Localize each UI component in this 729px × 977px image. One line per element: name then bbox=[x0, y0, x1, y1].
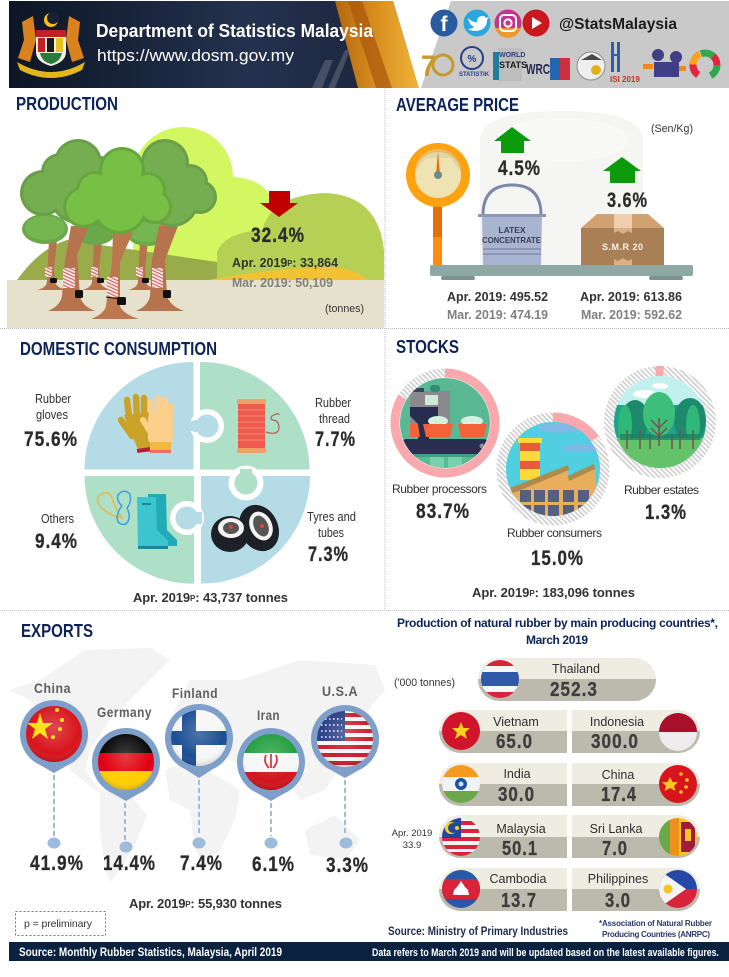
label: rubber consumers bbox=[507, 526, 602, 570]
arrow: production down bbox=[260, 191, 298, 217]
logo: WRC 2019 bbox=[526, 58, 570, 80]
card: Thailand: 252.3 bbox=[550, 679, 598, 701]
note: Malaysia April 2019: 33.9 bbox=[403, 840, 421, 851]
label: tyres and tubes: Tyres and bbox=[307, 510, 356, 524]
card: Vietnam: Vietnam bbox=[493, 715, 539, 729]
card: Cambodia: Cambodia bbox=[490, 872, 547, 886]
event logos bbox=[421, 42, 717, 84]
text: consumption total: Apr. 2019 bbox=[133, 590, 190, 605]
card: Philippines bbox=[572, 868, 700, 912]
plantation illustration bbox=[7, 127, 384, 328]
label: rubber gloves bbox=[24, 392, 78, 451]
label: rubber thread bbox=[315, 396, 356, 451]
tree right bbox=[132, 139, 217, 311]
background coins bbox=[480, 111, 643, 265]
icon: boots bbox=[137, 494, 177, 549]
panel: production bbox=[7, 94, 384, 328]
card: Sri Lanka: Sri Lanka bbox=[590, 822, 642, 836]
value: latex change: 4.5% bbox=[498, 157, 541, 180]
logo: census bbox=[643, 49, 686, 77]
label: tyres and tubes bbox=[307, 510, 356, 566]
icon: youtube bbox=[522, 10, 550, 36]
logo: SDG wheel bbox=[693, 53, 717, 77]
legend: preliminary bbox=[16, 912, 106, 936]
card: Indonesia bbox=[572, 710, 700, 753]
footer bar bbox=[9, 942, 729, 961]
pin: Germany bbox=[92, 704, 160, 875]
note: Malaysia April 2019: Apr. 2019 bbox=[392, 828, 432, 839]
label: rubber thread: 7.7% bbox=[315, 428, 356, 451]
arrow: latex up bbox=[494, 127, 531, 153]
card: India: India bbox=[503, 767, 531, 781]
header title: Department of Statistics Malaysia bbox=[96, 21, 374, 41]
label: tyres and tubes: 7.3% bbox=[308, 543, 349, 566]
label: others: 9.4% bbox=[35, 530, 78, 553]
text: latex March price: Mar. 2019: 474.19 bbox=[447, 307, 548, 322]
text: April production: : 33,864 bbox=[292, 255, 339, 270]
footer source: Source: Monthly Rubber Statistics, Malaysia, April 2019 bbox=[19, 947, 282, 959]
icon: rubber bands bbox=[98, 491, 131, 524]
card: Cambodia: 13.7 bbox=[501, 890, 537, 912]
label: rubber processors: Rubber processors bbox=[392, 482, 487, 496]
text: SMR April price: Apr. 2019: 613.86 bbox=[580, 289, 682, 304]
card: Thailand bbox=[478, 658, 656, 701]
value: Finland: 7.4% bbox=[180, 852, 223, 875]
note: Malaysia April 2019 bbox=[392, 828, 432, 851]
label: Finland: Finland bbox=[172, 685, 218, 701]
section dividers bbox=[0, 88, 729, 610]
panel: average price bbox=[396, 95, 693, 322]
chart: rubber consumers bbox=[502, 418, 604, 520]
panel: exports bbox=[9, 621, 385, 936]
icon: gloves bbox=[121, 397, 173, 453]
legend: preliminary: p = preliminary bbox=[24, 918, 93, 930]
tree front bbox=[63, 147, 172, 319]
card: India: 30.0 bbox=[498, 784, 535, 806]
label: SMR 20: S.M.R 20 bbox=[602, 242, 643, 252]
text: consumption total: P bbox=[190, 594, 196, 603]
label: rubber estates bbox=[624, 483, 699, 524]
footnote: ANRPC bbox=[599, 919, 712, 939]
value: China: 41.9% bbox=[30, 852, 84, 875]
icon: facebook bbox=[430, 10, 458, 36]
label: rubber estates: Rubber estates bbox=[624, 483, 699, 497]
label: rubber gloves: gloves bbox=[36, 408, 68, 422]
header banner bbox=[9, 1, 729, 88]
label: rubber thread: Rubber bbox=[315, 396, 351, 410]
card: Malaysia bbox=[439, 815, 567, 860]
card: China: 17.4 bbox=[601, 784, 637, 806]
logo: ISI 2019: ISI 2019 bbox=[610, 75, 640, 84]
logo: World Stats: STATS bbox=[499, 60, 527, 70]
source: Ministry of Primary Industries: Source: Ministry of Primary Industries bbox=[388, 926, 568, 938]
text: exports total: P bbox=[185, 900, 191, 909]
icon: thread spool bbox=[237, 399, 279, 453]
text: March production: Mar. 2019: 50,109 bbox=[232, 275, 333, 290]
value: Iran: 6.1% bbox=[252, 853, 295, 876]
value: USA: 3.3% bbox=[326, 854, 369, 877]
logo: 70 years bbox=[421, 50, 453, 83]
value: SMR change: 3.6% bbox=[607, 189, 648, 212]
pin: China bbox=[20, 680, 88, 875]
chart: rubber estates bbox=[605, 367, 715, 477]
card: Sri Lanka: 7.0 bbox=[602, 838, 628, 860]
label: rubber thread: thread bbox=[319, 412, 350, 426]
unit: thousand tonnes: ('000 tonnes) bbox=[394, 677, 455, 689]
text: stocks total: : 183,096 tonnes bbox=[535, 585, 635, 600]
label: rubber gloves: 75.6% bbox=[24, 428, 78, 451]
logo: forum bbox=[577, 52, 605, 80]
text: stocks total: Apr. 2019 bbox=[472, 585, 529, 600]
label: tyres and tubes: tubes bbox=[318, 526, 344, 540]
card: Sri Lanka bbox=[572, 815, 700, 860]
card: China bbox=[572, 763, 700, 806]
logo: World Stats bbox=[493, 48, 527, 81]
logo: 70 years: 7 bbox=[421, 50, 436, 83]
text: SMR March price: Mar. 2019: 592.62 bbox=[581, 307, 682, 322]
label: rubber consumers: 15.0% bbox=[531, 547, 584, 570]
icon: instagram bbox=[494, 10, 522, 38]
card: India bbox=[439, 763, 567, 806]
heading: domestic consumption: DOMESTIC CONSUMPTION bbox=[20, 339, 217, 359]
tree left bbox=[20, 139, 119, 311]
footnote: ANRPC: Producing Countries (ANRPC) bbox=[602, 930, 710, 939]
box: SMR 20 bbox=[581, 214, 664, 265]
text: stocks total: P bbox=[529, 589, 535, 598]
title: production by country: Production of natural rubber by main producing countries*, bbox=[397, 616, 718, 630]
value: production change: 32.4% bbox=[251, 224, 305, 247]
label: rubber consumers: Rubber consumers bbox=[507, 526, 602, 540]
label: Germany: Germany bbox=[97, 704, 152, 720]
scale illustration bbox=[406, 143, 693, 280]
logo: Hari Statistik: STATISTIK bbox=[459, 72, 490, 78]
icon: tyres bbox=[211, 498, 286, 558]
text: consumption total: : 43,737 tonnes bbox=[195, 590, 288, 605]
pin: USA bbox=[311, 683, 379, 877]
logo: Hari Statistik: % bbox=[468, 54, 477, 65]
unit: sen per kg: (Sen/Kg) bbox=[651, 123, 693, 135]
logo: World Stats: WORLD bbox=[499, 52, 525, 59]
heading: exports: EXPORTS bbox=[21, 621, 93, 641]
icon: Malaysia coat of arms bbox=[17, 12, 85, 78]
icon: twitter bbox=[464, 10, 490, 36]
text: latex April price: Apr. 2019: 495.52 bbox=[447, 289, 548, 304]
label: rubber estates: 1.3% bbox=[645, 501, 687, 524]
text: exports total: : 55,930 tonnes bbox=[190, 896, 282, 911]
arrow: SMR up bbox=[603, 157, 641, 183]
logo: WRC 2019: WRC bbox=[526, 61, 550, 78]
panel: stocks bbox=[392, 337, 715, 600]
text: April production: P bbox=[287, 259, 293, 268]
social handle: @StatsMalaysia bbox=[559, 16, 677, 33]
panel: domestic consumption bbox=[20, 339, 356, 605]
label: rubber gloves: Rubber bbox=[35, 392, 71, 406]
card: Thailand: Thailand bbox=[552, 662, 600, 676]
unit: tonnes: (tonnes) bbox=[325, 303, 364, 315]
text: exports total: Apr. 2019 bbox=[129, 896, 185, 911]
logo: ISI 2019 bbox=[610, 42, 640, 84]
label: others: Others bbox=[41, 512, 74, 526]
label: China: China bbox=[34, 680, 71, 696]
chart: rubber processors bbox=[395, 373, 495, 473]
text: April production: Apr. 2019 bbox=[232, 255, 290, 270]
label: Iran: Iran bbox=[257, 707, 280, 723]
card: Cambodia bbox=[439, 868, 567, 912]
label: others bbox=[35, 512, 78, 553]
card: China: China bbox=[602, 768, 634, 782]
title: production by country: March 2019 bbox=[526, 633, 588, 647]
card: Philippines: Philippines bbox=[588, 872, 648, 886]
footnote: ANRPC: *Association of Natural Rubber bbox=[599, 919, 712, 928]
label: USA: U.S.A bbox=[322, 683, 358, 699]
panel: natural rubber production by country bbox=[388, 616, 718, 939]
heading: production: PRODUCTION bbox=[16, 94, 118, 114]
icon: facebook: f bbox=[440, 13, 448, 36]
heading: stocks: STOCKS bbox=[396, 337, 459, 357]
card: Indonesia: 300.0 bbox=[591, 731, 639, 753]
label: rubber processors bbox=[392, 482, 487, 523]
label: rubber processors: 83.7% bbox=[416, 500, 470, 523]
card: Philippines: 3.0 bbox=[605, 890, 631, 912]
label: concentrate: CONCENTRATE bbox=[482, 235, 541, 245]
label: latex: LATEX bbox=[498, 225, 526, 235]
card: Indonesia: Indonesia bbox=[590, 715, 644, 729]
card: Vietnam: 65.0 bbox=[496, 731, 533, 753]
pin: Iran bbox=[237, 707, 305, 876]
back trees bbox=[22, 214, 170, 290]
title: production by country bbox=[397, 616, 718, 647]
pin: Finland bbox=[165, 685, 233, 875]
bucket: latex concentrate bbox=[478, 185, 546, 265]
card: Malaysia: 50.1 bbox=[502, 838, 538, 860]
puzzle pie chart bbox=[84, 362, 310, 584]
card: Vietnam bbox=[439, 710, 567, 753]
world map background bbox=[9, 648, 385, 882]
header url: https://www.dosm.gov.my bbox=[97, 46, 295, 65]
value: Germany: 14.4% bbox=[103, 852, 156, 875]
card: Malaysia: Malaysia bbox=[496, 822, 546, 836]
logo: Hari Statistik bbox=[459, 47, 490, 78]
heading: average price: AVERAGE PRICE bbox=[396, 95, 519, 115]
